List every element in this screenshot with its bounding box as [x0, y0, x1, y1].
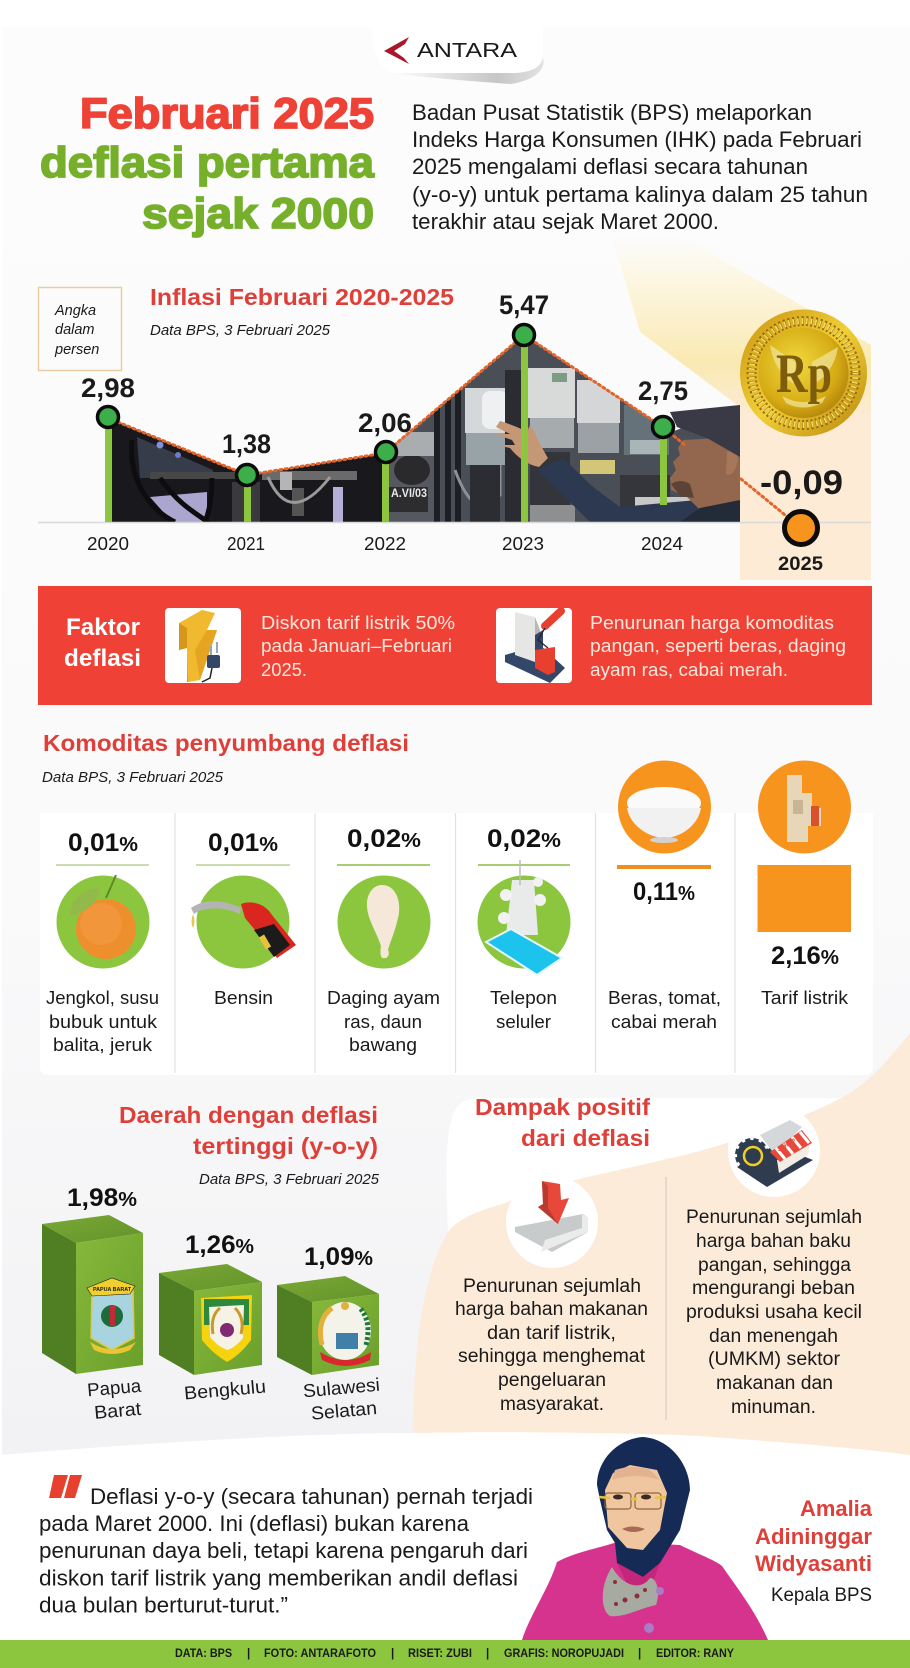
card: daging ayam: bawang: [349, 1034, 417, 1055]
card: telepon seluler: 0,02 %: [487, 825, 561, 853]
text: dampak kiri: [455, 1276, 648, 1415]
heading: dampak positif: Dampak positif: [475, 1094, 650, 1120]
name and title: Amalia: [800, 1496, 872, 1521]
card: beras: 0,11%: [633, 878, 695, 906]
text: dampak kiri: masyarakat.: [500, 1394, 604, 1415]
quote text: dua bulan berturut-turut.”: [39, 1592, 288, 1618]
name and title: Kepala BPS: [771, 1585, 872, 1606]
logo: ANTARA: [372, 27, 543, 84]
card: daging ayam: Daging ayam: [327, 987, 440, 1008]
intro paragraph: Badan Pusat Statistik (BPS) melaporkan: [412, 100, 812, 125]
text: dampak kanan: makanan dan: [716, 1373, 833, 1394]
text: dampak kanan: minuman.: [731, 1397, 816, 1418]
card: jengkol: 0,01%: [68, 829, 138, 857]
card: jengkol: [46, 829, 159, 1055]
footer credits: |: [638, 1648, 641, 1660]
bar: Bengkulu: [159, 1231, 267, 1404]
card: beras: cabai merah: [611, 1011, 717, 1032]
label: [86, 1375, 145, 1423]
icon: orange: [70, 875, 136, 959]
axis: [38, 522, 871, 524]
footer credits: GRAFIS: NOROPUJADI: [504, 1648, 624, 1660]
year labels: 2022: [364, 534, 406, 554]
footer credits: |: [391, 1648, 394, 1660]
text: dampak kiri: dan tarif listrik,: [487, 1323, 616, 1344]
heading: Faktor: [66, 614, 140, 641]
footer credits: FOTO: ANTARAFOTO: [264, 1648, 376, 1660]
card: bensin: [191, 829, 296, 1008]
portrait: Amalia Adininggar Widyasanti: [522, 1437, 768, 1640]
text: dampak kanan: harga bahan baku: [696, 1231, 851, 1252]
label: Barat: [93, 1398, 142, 1423]
text: penurunan harga: Penurunan harga komoditas: [590, 612, 834, 633]
icon: gold rupiah coin: Rp: [776, 343, 832, 405]
icon: price down arrow: [506, 1176, 598, 1268]
text: dampak kanan: (UMKM) sektor: [708, 1349, 841, 1370]
intro paragraph: (y-o-y) untuk pertama kalinya dalam 25 tahun: [412, 182, 868, 207]
card: jengkol: bubuk untuk: [49, 1011, 158, 1032]
unit note box: [38, 288, 122, 370]
icon: lightning and plug: [165, 608, 241, 683]
heading: daerah deflasi tertinggi: tertinggi (y-o-y): [193, 1133, 378, 1159]
values: [81, 290, 843, 502]
label on the meter panel: A.VI/03: [391, 488, 427, 500]
icon: fuel nozzle: [191, 901, 296, 958]
label: Bengkulu: [183, 1375, 267, 1404]
footer credits: DATA: BPS: [175, 1648, 232, 1660]
stems: [105, 337, 667, 522]
emblem: Sulawesi Selatan: [319, 1302, 371, 1366]
heading: daerah deflasi tertinggi: Daerah dengan deflasi: [119, 1102, 378, 1128]
panel: faktor deflasi: [38, 586, 872, 705]
year labels: 2020: [87, 534, 129, 554]
dotted trend line: [108, 335, 801, 528]
source note: Data BPS, 3 Februari 2025: [150, 323, 331, 339]
card: tarif listrik: 2,16%: [771, 942, 839, 970]
bar: Papua Barat: 1,98%: [67, 1184, 137, 1212]
quote text: pada Maret 2000. Ini (deflasi) bukan karena: [39, 1511, 470, 1536]
source note: Data BPS, 3 Februari 2025: [42, 770, 224, 786]
icon: tower and phone: [486, 860, 562, 975]
label: [302, 1374, 383, 1424]
card: beras: Beras, tomat,: [608, 987, 721, 1008]
intro paragraph: 2025 mengalami deflasi secara tahunan: [412, 154, 808, 179]
footer credits: [0, 1640, 910, 1668]
heading: daerah deflasi tertinggi: [119, 1102, 378, 1159]
heading: [64, 614, 141, 672]
marker 2025: [784, 512, 818, 544]
card: daging ayam: [327, 825, 440, 1055]
bottom white panel: [0, 1432, 910, 1640]
label: Sulawesi: [302, 1374, 381, 1401]
quote mark: [49, 1475, 82, 1498]
bar: Papua Barat: [42, 1184, 145, 1423]
quote text: Deflasi y-o-y (secara tahunan) pernah terjadi: [90, 1484, 533, 1509]
values: 5,47: [499, 290, 549, 320]
text: penurunan harga: ayam ras, cabai merah.: [590, 659, 788, 680]
logo: ANTARA: ANTARA: [417, 40, 518, 62]
text: penurunan harga: pangan, seperti beras, daging: [590, 635, 846, 656]
card: beras: [608, 760, 721, 1032]
card: bensin: 0,01%: [208, 829, 278, 857]
values: 2,06: [358, 408, 412, 438]
intro paragraph: terakhir atau sejak Maret 2000.: [412, 209, 719, 234]
text: diskon tarif: 2025.: [261, 659, 307, 680]
label: Selatan: [310, 1397, 378, 1424]
icon: gold rupiah coin: [740, 310, 867, 436]
year labels: 2021: [227, 534, 265, 554]
bar: Sulawesi Selatan: [277, 1243, 383, 1424]
icon: rice bowl: [627, 787, 701, 843]
year labels: 2023: [502, 534, 544, 554]
card: bensin: Bensin: [214, 987, 273, 1008]
text: penurunan harga: [590, 612, 846, 680]
panel: komoditas cards: [40, 760, 873, 1075]
unit note box: dalam: [55, 322, 94, 338]
text: diskon tarif: pada Januari–Februari: [261, 635, 452, 656]
stem overlays are drawn in the chart group: [537, 458, 710, 522]
card: telepon seluler: seluler: [496, 1011, 551, 1032]
icon: shop and gear: SHOP: [776, 1138, 797, 1153]
name and title: Widyasanti: [755, 1551, 872, 1576]
year labels: [87, 534, 823, 575]
values: 2,98: [81, 373, 135, 403]
quote text: diskon tarif listrik yang memberikan andil deflasi: [39, 1566, 518, 1590]
photo: technician checking electricity meters: [108, 330, 740, 522]
name and title: [755, 1496, 872, 1606]
card: daging ayam: ras, daun: [344, 1011, 422, 1032]
intro paragraph: [412, 100, 868, 234]
bar: Sulawesi Selatan: 1,09%: [304, 1243, 373, 1271]
text: diskon tarif: Diskon tarif listrik 50%: [261, 612, 455, 633]
decorative peach and white background shapes: [413, 1033, 910, 1460]
text: dampak kiri: Penurunan sejumlah: [463, 1276, 641, 1297]
card: jengkol: balita, jeruk: [53, 1034, 153, 1055]
quote text: [39, 1484, 533, 1618]
year labels: 2024: [641, 534, 683, 554]
icon: drumstick: [367, 885, 399, 958]
values: 2,75: [638, 376, 688, 406]
values: 1,38: [222, 429, 271, 459]
footer credits: |: [486, 1648, 489, 1660]
title: [40, 90, 375, 238]
name and title: Adininggar: [755, 1524, 872, 1549]
title: sejak 2000: [142, 190, 374, 238]
unit note box: persen: [54, 342, 99, 358]
title: deflasi pertama: [40, 139, 375, 187]
heading: komoditas: Komoditas penyumbang deflasi: [43, 730, 409, 756]
heading: deflasi: [64, 645, 141, 672]
text: dampak kiri: pengeluaran: [498, 1370, 606, 1391]
card: jengkol: Jengkol, susu: [46, 987, 159, 1008]
year labels: 2025: [778, 554, 823, 575]
card: telepon seluler: Telepon: [490, 987, 557, 1008]
icon: price tag and bars: [496, 608, 572, 683]
chart title: Inflasi Februari 2020-2025: [150, 284, 454, 310]
heading: dampak positif: dari deflasi: [521, 1125, 650, 1151]
card: tarif listrik: Tarif listrik: [761, 987, 849, 1008]
text: dampak kiri: sehingga menghemat: [458, 1346, 646, 1367]
values: -0,09: [760, 464, 843, 502]
footer credits: |: [247, 1648, 250, 1660]
markers: [98, 324, 674, 486]
text: dampak kanan: mengurangi beban: [692, 1278, 855, 1299]
card: telepon seluler: [478, 825, 570, 1032]
bar: Bengkulu: 1,26%: [185, 1231, 254, 1259]
text: dampak kanan: Penurunan sejumlah: [686, 1207, 862, 1228]
icon: circuit breaker: [787, 775, 821, 842]
card: tarif listrik: [758, 760, 851, 1008]
text: dampak kanan: pangan, sehingga: [698, 1255, 851, 1276]
icon: shop and gear: [728, 1105, 820, 1197]
line chart: inflasi Februari 2020-2025: [38, 284, 871, 575]
card: daging ayam: 0,02 %: [347, 825, 421, 853]
text: dampak kiri: harga bahan makanan: [455, 1299, 648, 1320]
title: Februari 2025: [80, 90, 374, 138]
text: dampak kanan: [686, 1207, 862, 1418]
label: Papua: [86, 1375, 143, 1400]
light beam and peach panel behind 2025: [612, 236, 871, 580]
text: dampak kanan: produksi usaha kecil: [686, 1302, 862, 1323]
divider: [665, 1177, 667, 1420]
intro paragraph: Indeks Harga Konsumen (IHK) pada Februari: [412, 127, 862, 152]
quote text: penurunan daya beli, tetapi karena pengaruh dari: [39, 1538, 528, 1563]
footer credits: EDITOR: RANY: [656, 1648, 734, 1660]
emblem: Bengkulu: [201, 1295, 252, 1362]
source note: Data BPS, 3 Februari 2025: [199, 1172, 380, 1188]
unit note box: Angka: [54, 303, 96, 319]
text: dampak kanan: dan menengah: [709, 1326, 838, 1347]
emblem: Papua Barat: [87, 1278, 136, 1354]
emblem: Papua Barat: PAPUA BARAT: [93, 1287, 132, 1293]
text: diskon tarif: [261, 612, 455, 680]
heading: dampak positif: [475, 1094, 650, 1151]
footer credits: RISET: ZUBI: [408, 1648, 472, 1660]
